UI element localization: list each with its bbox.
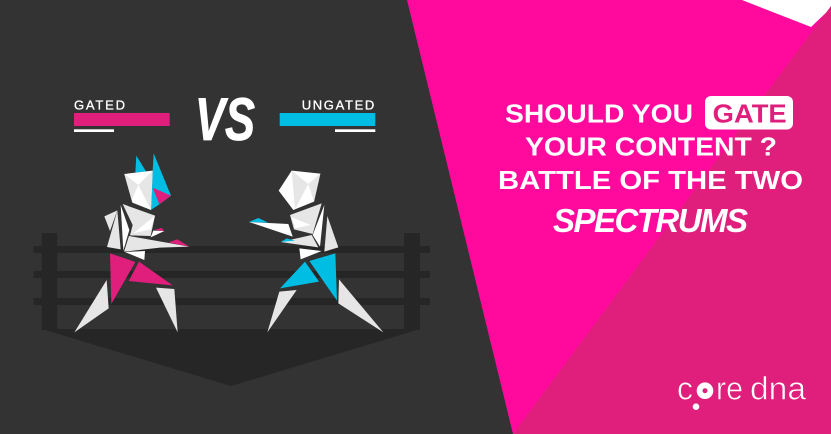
bright pink panel (407, 0, 831, 434)
line 1: SHOULD YOU (505, 99, 693, 129)
left fighter: gated (74, 153, 189, 332)
line 3: BATTLE OF THE TWO (498, 165, 803, 195)
right fighter: ungated (249, 171, 383, 332)
ungated health bar (280, 113, 375, 132)
gated label: GATED (74, 98, 125, 112)
core dna logo: c (677, 370, 693, 406)
gate badge: GATE (713, 99, 787, 129)
core dna logo (677, 370, 806, 410)
core dna logo: dna (750, 370, 806, 406)
dark pink panel (513, 6, 831, 434)
gated health bar (74, 113, 170, 132)
VS text: VS (195, 86, 255, 153)
headline (498, 96, 803, 239)
white corner (742, 0, 831, 27)
line 2: YOUR CONTENT ? (525, 132, 777, 162)
ungated label: UNGATED (302, 98, 374, 112)
line 4: SPECTRUMS (553, 202, 748, 239)
core dna logo: re (716, 370, 743, 406)
boxing ring (34, 233, 430, 386)
